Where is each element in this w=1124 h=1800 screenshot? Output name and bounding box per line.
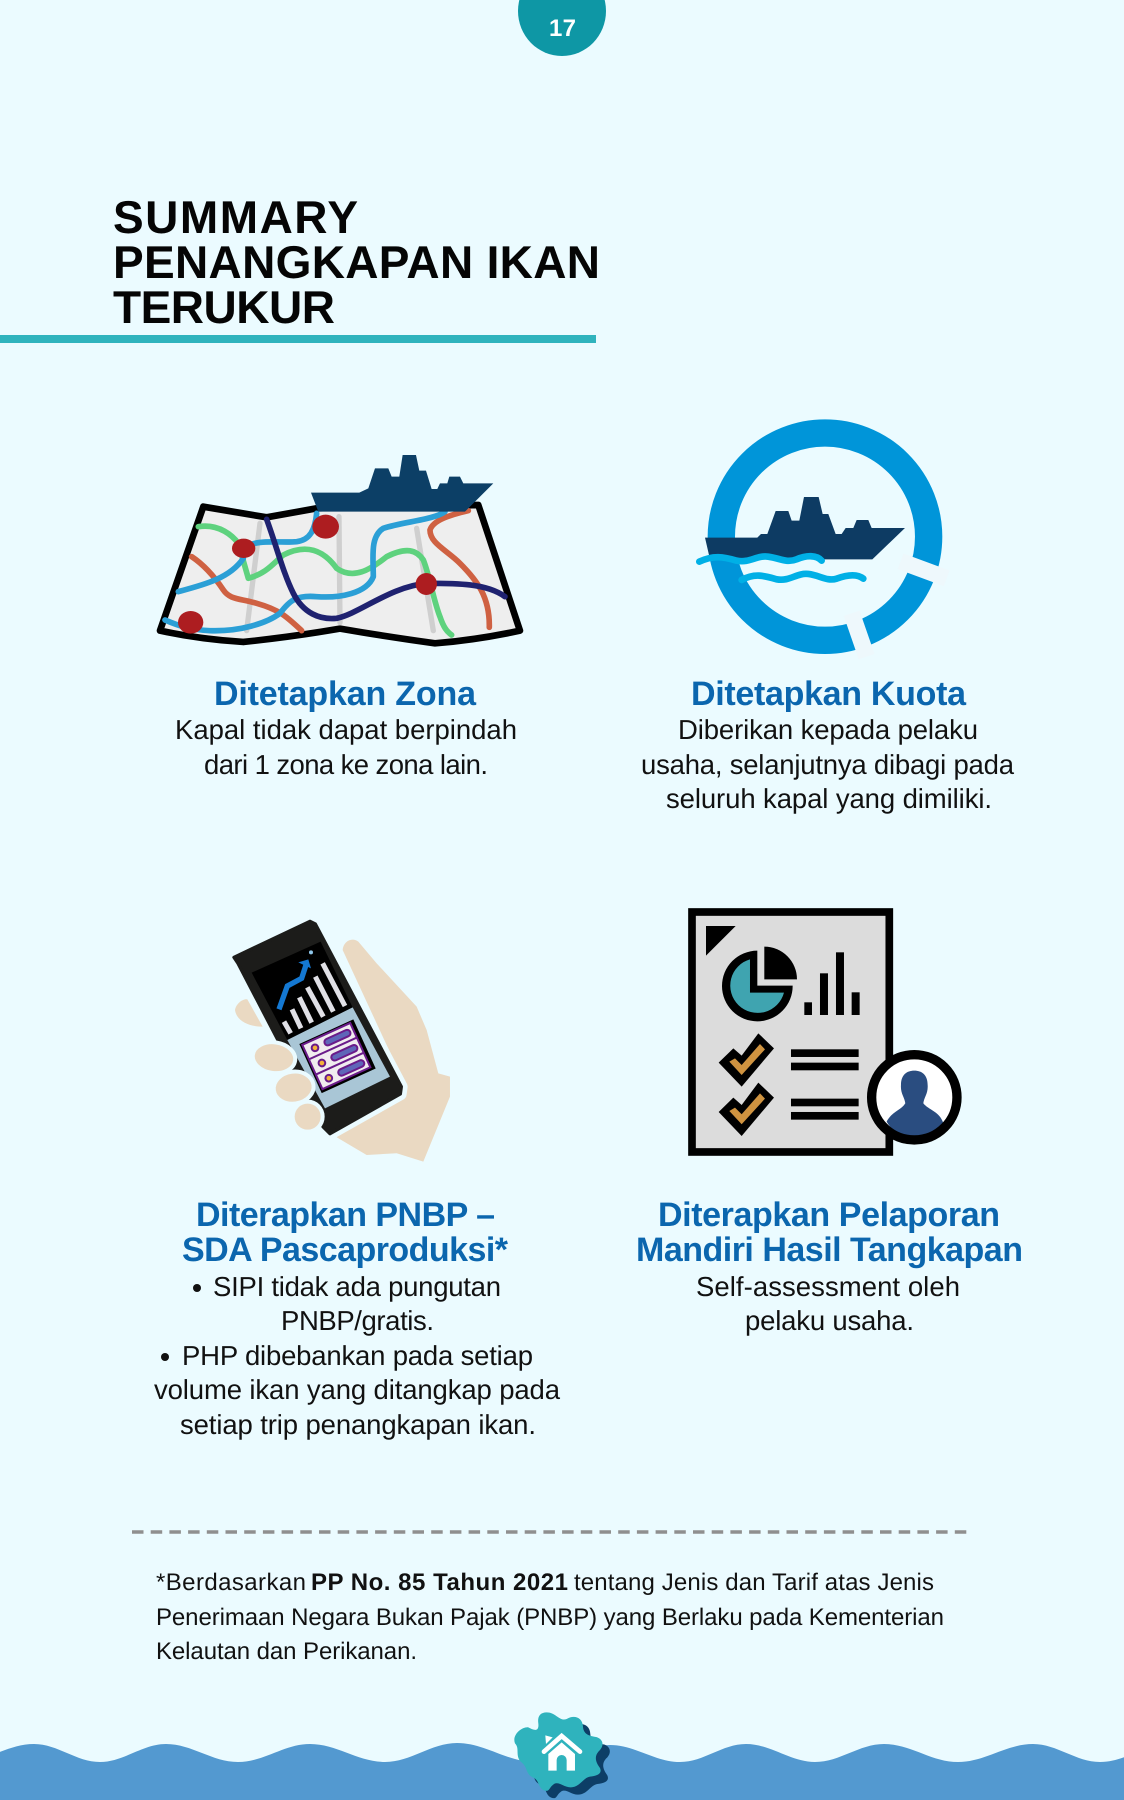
heading: Ditetapkan Kuota: Ditetapkan Kuota <box>691 675 967 713</box>
text: pelaporan description <box>696 1271 960 1336</box>
text: kuota description: seluruh kapal yang dimiliki. <box>666 783 992 814</box>
footnote: Penerimaan Negara Bukan Pajak (PNBP) yang Berlaku pada Kementerian <box>156 1604 944 1631</box>
text: PNBP bullet list: SIPI tidak ada pungutan <box>213 1271 501 1302</box>
icon: hand holding phone <box>234 921 450 1162</box>
text: zona description: dari 1 zona ke zona lain. <box>204 749 488 780</box>
heading: Diterapkan PNBP <box>182 1196 509 1269</box>
footnote: Kelautan dan Perikanan. <box>156 1638 417 1665</box>
footnote: PP No. 85 Tahun 2021 <box>311 1569 568 1596</box>
icon: map with ship <box>160 455 520 643</box>
title: SUMMARY <box>113 191 358 243</box>
page number badge: 17 <box>549 15 576 42</box>
icon: home button <box>514 1712 610 1798</box>
title: TERUKUR <box>113 281 335 333</box>
heading: Diterapkan Pelaporan: Mandiri Hasil Tangkapan <box>636 1231 1023 1269</box>
heading: Diterapkan PNBP: SDA Pascaproduksi* <box>182 1231 509 1269</box>
heading: Diterapkan Pelaporan <box>636 1196 1023 1269</box>
heading: Diterapkan Pelaporan: Diterapkan Pelaporan <box>658 1196 1000 1234</box>
heading: Ditetapkan Zona: Ditetapkan Zona <box>214 675 477 713</box>
footnote: *Berdasarkan <box>156 1569 306 1596</box>
title <box>113 191 600 333</box>
icon: quota ring with ship <box>699 433 947 657</box>
text: pelaporan description: pelaku usaha. <box>745 1305 914 1336</box>
text: pelaporan description: Self-assessment oleh <box>696 1271 960 1302</box>
text: PNBP bullet list: PHP dibebankan pada setiap <box>182 1340 533 1371</box>
heading: Diterapkan PNBP: Diterapkan PNBP – <box>196 1196 495 1234</box>
title underline <box>0 335 596 343</box>
text: kuota description: Diberikan kepada pelaku <box>678 714 978 745</box>
text: PNBP bullet list: volume ikan yang ditangkap pada <box>154 1374 561 1405</box>
footnote: tentang Jenis dan Tarif atas Jenis <box>574 1569 934 1596</box>
icon: report document with user <box>692 912 957 1152</box>
text: PNBP bullet list: setiap trip penangkapan ikan. <box>180 1409 536 1440</box>
title: PENANGKAPAN IKAN <box>113 236 600 288</box>
footnote <box>156 1569 944 1665</box>
bottom wave <box>0 1743 1124 1800</box>
text: PNBP bullet list <box>154 1271 561 1440</box>
text: kuota description: usaha, selanjutnya dibagi pada <box>641 749 1015 780</box>
dashed divider <box>132 1530 967 1534</box>
page number badge <box>518 0 606 56</box>
text: zona description <box>175 714 517 780</box>
text: zona description: Kapal tidak dapat berpindah <box>175 714 517 745</box>
text: kuota description <box>641 714 1015 814</box>
text: PNBP bullet list: PNBP/gratis. <box>281 1305 434 1336</box>
